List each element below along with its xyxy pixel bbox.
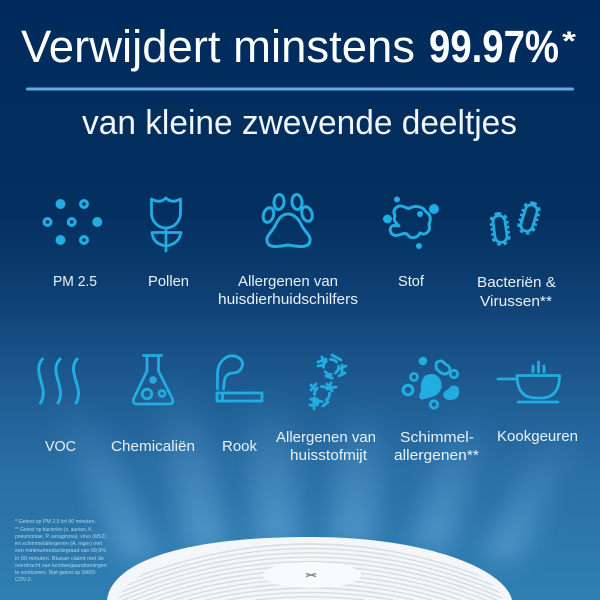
label: Schimmelallergenen: allergenen** — [394, 448, 479, 464]
label: Allergenen van huisstofmijt: huisstofmijt — [290, 448, 367, 464]
label: Bacteriën en Virussen: Bacteriën & — [477, 275, 556, 291]
footnote: overdracht van luchtwegaandoeningen — [15, 563, 107, 569]
icon: VOC vapour — [39, 359, 79, 403]
icon: paw — [261, 194, 314, 246]
footnote: en schimmelallergenen (A. niger) met — [15, 541, 102, 547]
icon: tulip pollen — [152, 198, 181, 251]
label: Allergenen van huisstofmijt — [276, 430, 376, 464]
icon: cigarette smoke — [217, 356, 262, 401]
light rays above purifier — [50, 380, 580, 560]
footnote: pneumoniae, P. aeruginosa), virus (MS2) — [15, 534, 106, 540]
footnote: ** Getest op bacteriën (s. aureus, K. — [15, 527, 93, 533]
label: Schimmelallergenen — [394, 430, 479, 464]
label: Bacteriën en Virussen — [477, 275, 556, 310]
footnote: in 60 minuten. Blueair claimt niet de — [15, 556, 104, 562]
label: PM 2.5: PM 2.5 — [53, 274, 97, 290]
footnote: een minimumreductiegraad van 99,9% — [15, 548, 106, 554]
footnote: * Getest op PM 2.5 tot 90 minuten. — [15, 519, 96, 525]
air purifier top — [107, 537, 512, 600]
icon: dust cloud — [383, 196, 439, 249]
label: Chemicaliën: Chemicaliën — [111, 439, 195, 455]
label: Bacteriën en Virussen: Virussen** — [480, 294, 552, 310]
label: Kookgeuren: Kookgeuren — [497, 429, 578, 445]
subtitle: van kleine zwevende deeltjes — [82, 104, 517, 142]
label: Schimmelallergenen: Schimmel- — [400, 430, 474, 446]
footnote — [15, 519, 107, 583]
title: Verwijdert minstens — [21, 21, 415, 72]
icon: bacteria and viruses — [492, 203, 539, 243]
label: Pollen: Pollen — [148, 274, 189, 290]
icon: mould spores — [403, 357, 459, 408]
label: Stof: Stof — [398, 274, 425, 290]
title divider — [26, 88, 574, 90]
label: Allergenen van huisdierhuidschilfers: huisdierhuidschilfers — [218, 292, 358, 308]
icon: cooking pot — [498, 362, 560, 402]
label: VOC: VOC — [45, 439, 76, 455]
footnote: te voorkomen. Niet getest op SARS- — [15, 570, 97, 576]
title: * — [562, 26, 577, 56]
label: Allergenen van huisstofmijt: Allergenen van — [276, 430, 376, 446]
icon: dust mites — [310, 355, 346, 409]
label: Allergenen van huisdierhuidschilfers — [218, 274, 358, 308]
label: Allergenen van huisdierhuidschilfers: Allergenen van — [238, 274, 338, 290]
title: 99.97% — [429, 21, 559, 72]
footnote: COV-2. — [15, 577, 32, 583]
icon: PM 2.5 particles — [44, 199, 102, 245]
icon: chemical flask — [133, 356, 173, 404]
label: Rook: Rook — [222, 439, 258, 455]
